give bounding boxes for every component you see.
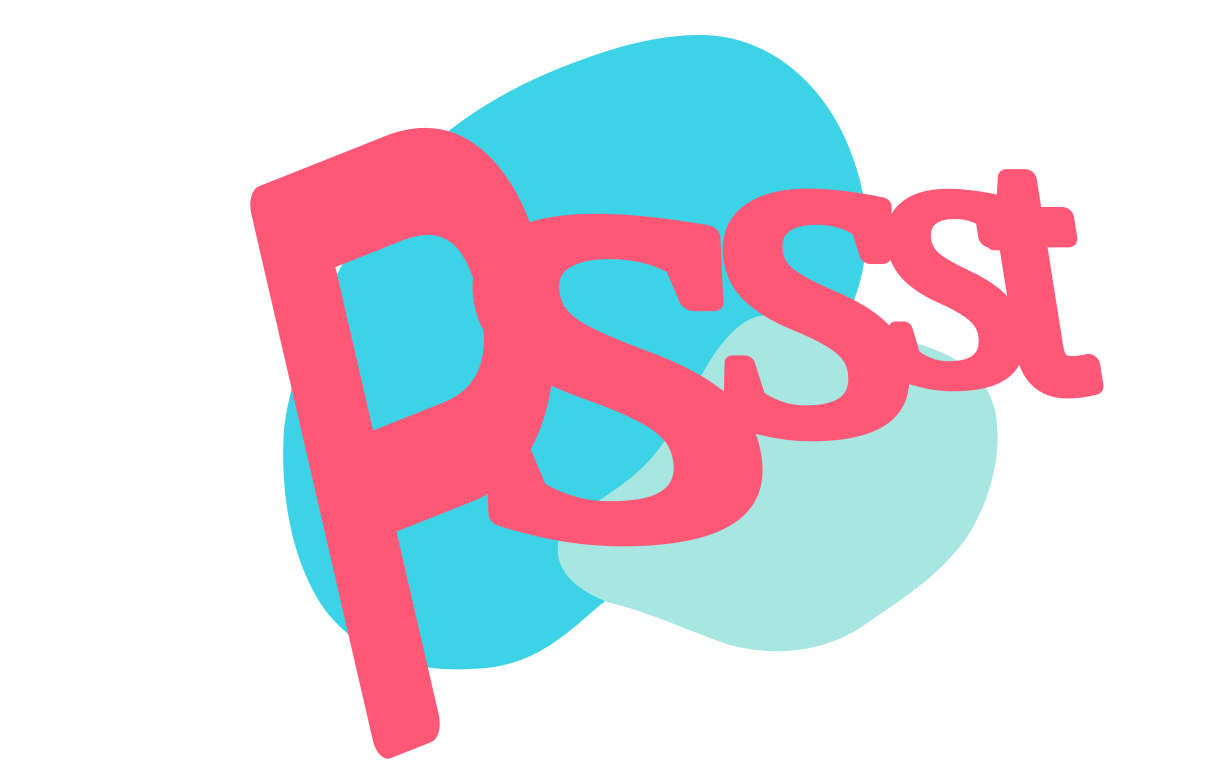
letter: small s: s bbox=[832, 34, 1060, 465]
letter: medium s: s bbox=[651, 0, 957, 535]
blob: mint bbox=[558, 315, 998, 651]
letter: t: t bbox=[961, 98, 1108, 455]
blob: large cyan bbox=[283, 35, 866, 669]
